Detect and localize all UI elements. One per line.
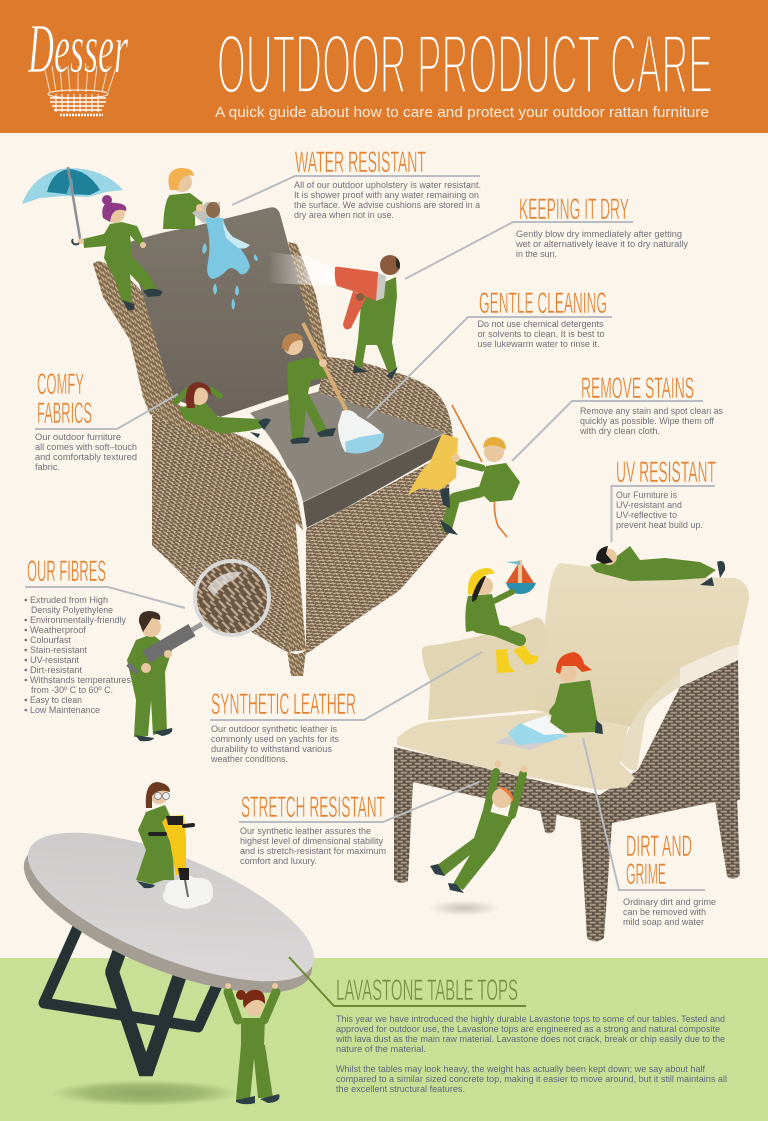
body text: compared to a similar sized concrete top, making it easier to move around, but it still maintains all — [336, 1074, 727, 1084]
bullet list: Extruded from High — [30, 595, 108, 605]
body text: UV-reflective to — [616, 510, 677, 520]
body text: quickly as possible. Wipe them off — [580, 416, 714, 426]
callout: dirt and grime — [583, 738, 716, 927]
character: man with mop — [282, 323, 384, 454]
body text: comfort and luxury. — [240, 856, 317, 866]
lavastone table — [5, 802, 332, 1106]
body text: Our synthetic leather assures the — [240, 826, 371, 836]
character: rope climber with cloth — [408, 405, 520, 537]
wicker frame — [394, 658, 740, 823]
callout: dirt and grime: DIRT AND — [626, 830, 692, 863]
callout: lavastone table tops — [289, 957, 727, 1094]
body text: It is shower proof with any water remaining on — [294, 190, 479, 200]
body text — [240, 826, 386, 866]
body text: all comes with soft–touch — [35, 442, 137, 452]
body text: with dry clean cloth. — [579, 426, 660, 436]
body text — [294, 180, 481, 220]
body text: durability to withstand various — [211, 744, 333, 754]
table edge — [5, 810, 331, 1024]
logo: Desser wicker chair — [27, 11, 128, 115]
logo: Desser wicker chair: Desser — [27, 11, 128, 88]
seat cushion — [397, 712, 635, 790]
body text: Our outdoor furniture — [35, 432, 121, 442]
table legs — [44, 927, 218, 1074]
subtitle: A quick guide about how to care and protect your outdoor rattan furniture — [215, 105, 709, 121]
bullet list: UV-resistant — [30, 655, 79, 665]
body text: Whilst the tables may look heavy, the weight has actually been kept down; we say about half — [336, 1064, 705, 1074]
magnifier — [146, 561, 269, 657]
body text — [616, 490, 703, 530]
crater — [163, 875, 213, 909]
front right leg — [580, 818, 612, 942]
character: reclining woman — [176, 382, 271, 438]
body text: dry area when not in use. — [294, 210, 394, 220]
bullet list: Withstands temperatures — [30, 675, 131, 685]
soap foam — [494, 715, 568, 750]
heading — [37, 368, 92, 430]
callout: synthetic leather: SYNTHETIC LEATHER — [211, 688, 356, 721]
body text: prevent heat build up. — [616, 520, 703, 530]
middle back leg — [540, 810, 557, 834]
body text: All of our outdoor upholstery is water resistant. — [294, 180, 481, 190]
callout: comfy fabrics — [35, 368, 178, 472]
body text: commonly used on yachts for its — [211, 734, 339, 744]
character: boy hanging from chair — [428, 760, 528, 916]
icon: water splash and drops — [202, 218, 258, 310]
body text: and is stretch-resistant for maximum — [240, 846, 386, 856]
body text: highest level of dimensional stability — [240, 836, 383, 846]
body text — [623, 897, 716, 927]
front left leg — [394, 747, 413, 883]
callout: lavastone table tops: LAVASTONE TABLE TOPS — [336, 974, 518, 1007]
header banner — [0, 0, 768, 133]
yellow cloth — [408, 434, 458, 495]
back cushion — [533, 563, 749, 727]
body text: wet or alternatively leave it to dry naturally — [515, 239, 689, 249]
body text: use lukewarm water to rinse it. — [478, 339, 600, 349]
bullet list: Low Maintenance — [30, 705, 100, 715]
body text — [335, 1014, 727, 1094]
yellow boots — [496, 645, 538, 673]
background: green footer band — [0, 958, 768, 1121]
callout: stretch resistant: STRETCH RESISTANT — [241, 791, 385, 824]
body text: This year we have introduced the highly durable Lavastone tops to some of our tables. Tested and — [336, 1014, 725, 1024]
left arm cushion — [422, 618, 546, 720]
body text: Remove any stain and spot clean as — [580, 406, 723, 416]
bullet list: Weatherproof — [30, 625, 87, 635]
front-left arm panel — [152, 407, 306, 652]
callout: our fibres: OUR FIBRES — [27, 555, 106, 588]
callout: water resistant — [232, 146, 481, 220]
bullet list: Easy to clean — [30, 695, 82, 705]
umbrella — [22, 167, 123, 244]
jackhammer — [150, 815, 193, 897]
body text: fabric. — [35, 462, 60, 472]
toy boat — [506, 560, 536, 594]
body text: nature of the material. — [336, 1044, 426, 1054]
callout: keeping it dry: KEEPING IT DRY — [519, 193, 629, 226]
body text: Our outdoor synthetic leather is — [211, 724, 337, 734]
front corner post — [280, 470, 306, 650]
body text: the surface. We advise cushions are stored in a — [294, 200, 480, 210]
bucket — [192, 202, 220, 223]
mop — [303, 323, 384, 454]
character: girl with toy boat — [465, 560, 538, 673]
body text: UV-resistant and — [616, 500, 682, 510]
body text: Do not use chemical detergents — [478, 319, 604, 329]
body text: Gently blow dry immediately after getting — [516, 229, 682, 239]
callout: stretch resistant — [239, 782, 479, 866]
body text: and comfortably textured — [35, 452, 137, 462]
body text: approved for outdoor use, the Lavastone tops are engineered as a strong and natural composite — [336, 1024, 720, 1034]
chair foot — [287, 650, 306, 676]
air stream — [268, 252, 335, 285]
body text — [35, 432, 137, 472]
left wing and side of chair — [93, 261, 178, 415]
body text: Our Furniture is — [616, 490, 677, 500]
heading: COMFY — [37, 368, 84, 401]
rope — [452, 405, 507, 537]
body text — [515, 229, 689, 259]
character: sunglasses man sleeping — [590, 546, 725, 586]
callout: our fibres — [24, 555, 185, 715]
character: woman holding table — [225, 983, 280, 1104]
table top — [10, 802, 332, 1012]
body text — [210, 724, 339, 764]
callout: synthetic leather — [210, 652, 482, 764]
callout: comfy fabrics: FABRICS — [37, 397, 92, 430]
callout: keeping it dry — [405, 193, 689, 279]
body text: Ordinary dirt and grime — [623, 897, 716, 907]
body text — [478, 319, 604, 349]
body text: with lava dust as the main raw material. Lavastone does not crack, break or chip easily due to the — [335, 1034, 725, 1044]
right wing edge — [288, 242, 328, 362]
callout: gentle cleaning — [367, 287, 612, 418]
back cushion — [127, 207, 322, 417]
bullet list — [24, 595, 131, 715]
body text: weather conditions. — [210, 754, 288, 764]
character: umbrella woman — [22, 167, 163, 310]
body text: can be removed with — [623, 907, 706, 917]
right lower panel — [306, 440, 452, 654]
left arm top — [152, 403, 303, 530]
seat cushion top — [250, 392, 445, 502]
right arm — [318, 357, 453, 450]
wicker armchair with grey cushions — [93, 207, 453, 676]
heading — [626, 830, 692, 891]
shadow — [428, 900, 500, 916]
bullet list: Colourfast — [30, 635, 71, 645]
callout: uv resistant — [612, 456, 716, 542]
character: man with hair dryer — [268, 252, 400, 379]
body text — [579, 406, 723, 436]
body text: the excellent structural features. — [336, 1084, 465, 1094]
hair dryer — [335, 267, 386, 329]
body text: mild soap and water — [623, 917, 704, 927]
cream armchair with wicker frame — [394, 563, 749, 942]
floor shadow — [50, 1080, 240, 1106]
bullet list: Stain-resistant — [30, 645, 87, 655]
character: woman pouring bucket — [163, 168, 220, 229]
character: man with magnifying glass — [127, 561, 269, 741]
back right leg — [715, 795, 740, 879]
bullet list: Density Polyethylene — [31, 605, 113, 615]
body text: in the sun. — [516, 249, 557, 259]
text: GENTLE CLEANING — [479, 287, 607, 320]
character: red-haired girl cleaning — [494, 652, 603, 750]
bullet list: Environmentally-friendly — [30, 615, 126, 625]
bullet list: Dirt-resistant — [30, 665, 83, 675]
character: jackhammer woman — [136, 782, 213, 909]
body text: or solvents to clean. It is best to — [478, 329, 604, 339]
callout: remove stains — [512, 372, 723, 461]
seat cushion front — [303, 433, 445, 530]
right arm roll — [620, 645, 738, 770]
bullet list: from -30º C to 60º C. — [31, 685, 113, 695]
woman — [78, 195, 163, 310]
heading: GRIME — [626, 858, 666, 891]
callout: water resistant: WATER RESISTANT — [295, 146, 426, 179]
